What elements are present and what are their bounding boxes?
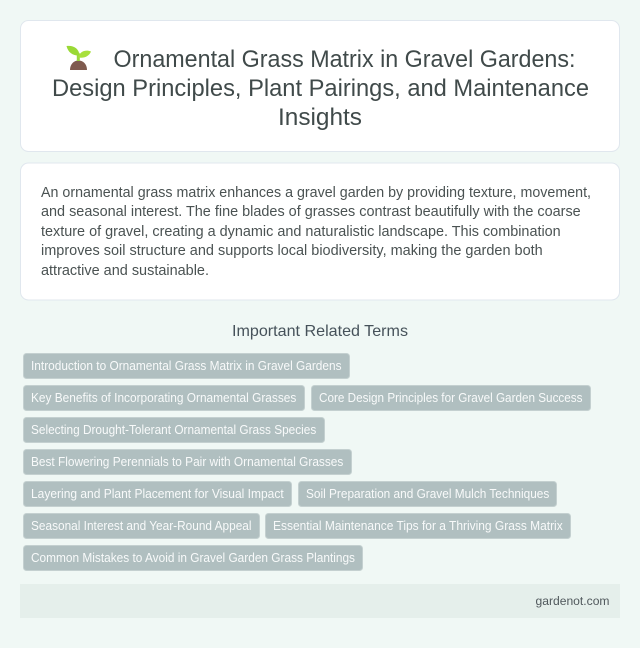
heading: title: Design Principles, Plant Pairings, and Maintenance [52, 75, 589, 102]
tag: flowering perennials [24, 450, 352, 474]
panel: intro paragraph card [20, 163, 620, 300]
heading: important related terms: Important Related Terms [232, 323, 408, 340]
text block: intro paragraph: texture of gravel, creating a dynamic and naturalistic landscape. This combination [41, 224, 561, 240]
tag: maintenance tips [266, 514, 570, 538]
heading: title: Insights [278, 104, 362, 131]
text block: intro paragraph [41, 185, 591, 279]
tag: maintenance tips: Essential Maintenance Tips for a Thriving Grass Matrix [273, 519, 563, 533]
tag: drought-tolerant species: Selecting Drought-Tolerant Ornamental Grass Species [31, 423, 316, 437]
footer bar [20, 584, 620, 618]
tag: introduction: Introduction to Ornamental Grass Matrix in Gravel Gardens [31, 359, 342, 373]
icon: seedling [66, 46, 91, 70]
tag: core design principles [312, 386, 590, 410]
tag: layering [24, 482, 292, 506]
tag: core design principles: Core Design Principles for Gravel Garden Success [319, 391, 582, 405]
tag: layering: Layering and Plant Placement for Visual Impact [31, 487, 284, 501]
tag: key benefits [24, 386, 304, 410]
text block: intro paragraph: and seasonal interest. The fine blades of grasses contrast beautifully with the coarse [41, 204, 581, 220]
tag: introduction [24, 354, 350, 378]
tag: common mistakes [24, 546, 362, 570]
tag: drought-tolerant species [24, 418, 324, 442]
tag: common mistakes: Common Mistakes to Avoid in Gravel Garden Grass Plantings [31, 551, 355, 565]
tag: key benefits: Key Benefits of Incorporating Ornamental Grasses [31, 391, 296, 405]
tag: flowering perennials: Best Flowering Perennials to Pair with Ornamental Grasses [31, 455, 343, 469]
heading: title: Ornamental Grass Matrix in Gravel Gardens: [114, 46, 576, 73]
footer text: site name: gardenot.com [536, 594, 610, 608]
tag: soil preparation [298, 482, 556, 506]
panel: title card [20, 20, 620, 152]
tag: soil preparation: Soil Preparation and Gravel Mulch Techniques [306, 487, 549, 501]
text block: intro paragraph: attractive and sustainable. [41, 263, 209, 279]
tag: seasonal interest: Seasonal Interest and Year-Round Appeal [31, 519, 252, 533]
tag: seasonal interest [24, 514, 260, 538]
text block: intro paragraph: improves soil structure and supports local biodiversity, making the garden both [41, 243, 543, 259]
tag list: related terms [24, 354, 590, 570]
text block: intro paragraph: An ornamental grass matrix enhances a gravel garden by providing texture, movement, [41, 185, 591, 201]
heading: title [52, 46, 589, 131]
